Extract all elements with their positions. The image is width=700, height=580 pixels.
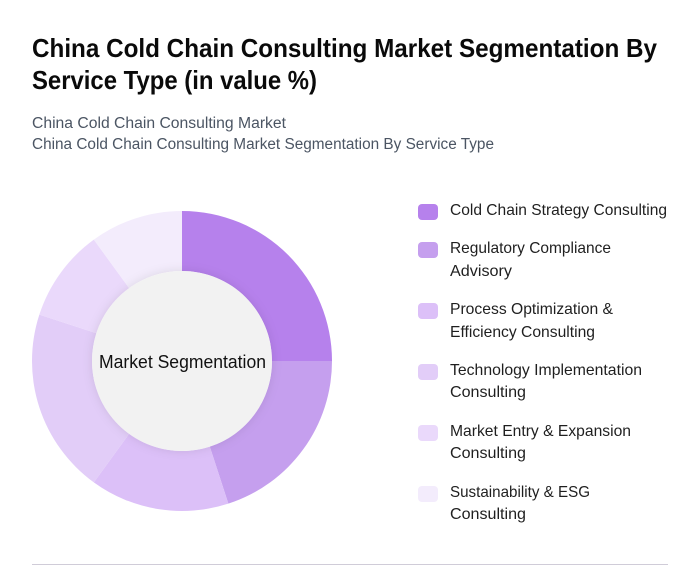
legend item: Cold Chain Strategy Consulting: Cold Chain Strategy Consulting	[450, 202, 667, 219]
legend item: Sustainability & ESG Consulting	[418, 484, 590, 523]
segment: Market Entry & Expansion Consulting	[39, 240, 129, 333]
legend item: Regulatory Compliance Advisory: Regulatory Compliance	[450, 240, 611, 257]
subtitle: China Cold Chain Consulting Market	[32, 115, 287, 132]
title	[32, 33, 657, 95]
segment: Cold Chain Strategy Consulting	[182, 211, 332, 361]
legend item: Process Optimization & Efficiency Consulting	[418, 301, 613, 341]
segment: Process Optimization & Efficiency Consulting	[94, 434, 228, 511]
segment: Sustainability & ESG Consulting	[94, 211, 182, 288]
subtitle: China Cold Chain Consulting Market Segmentation By Service Type	[32, 136, 494, 153]
donut centre label: Market Segmentation	[99, 352, 266, 372]
legend item: Process Optimization & Efficiency Consulting: Process Optimization &	[450, 301, 613, 318]
donut centre circle	[92, 271, 272, 451]
donut chart	[32, 211, 332, 511]
legend item: Process Optimization & Efficiency Consulting: Efficiency Consulting	[450, 324, 595, 341]
legend item: Technology Implementation Consulting: Consulting	[450, 384, 526, 401]
legend item: Sustainability & ESG Consulting: Consulting	[450, 506, 526, 523]
legend	[418, 202, 667, 523]
legend item: Regulatory Compliance Advisory: Advisory	[450, 263, 512, 280]
segment: Regulatory Compliance Advisory	[210, 361, 332, 504]
legend item: Sustainability & ESG Consulting: Sustainability & ESG	[450, 484, 590, 501]
legend item: Technology Implementation Consulting	[418, 362, 642, 401]
title: Service Type (in value %)	[32, 65, 317, 95]
legend item: Regulatory Compliance Advisory	[418, 240, 611, 280]
legend item: Market Entry & Expansion Consulting: Market Entry & Expansion	[450, 423, 631, 440]
title: China Cold Chain Consulting Market Segmentation By	[32, 33, 657, 63]
legend item: Technology Implementation Consulting: Technology Implementation	[450, 362, 642, 379]
legend item: Market Entry & Expansion Consulting	[418, 423, 631, 462]
subtitle	[32, 115, 494, 153]
segment: Technology Implementation Consulting	[32, 315, 129, 482]
legend item: Market Entry & Expansion Consulting: Consulting	[450, 445, 526, 462]
